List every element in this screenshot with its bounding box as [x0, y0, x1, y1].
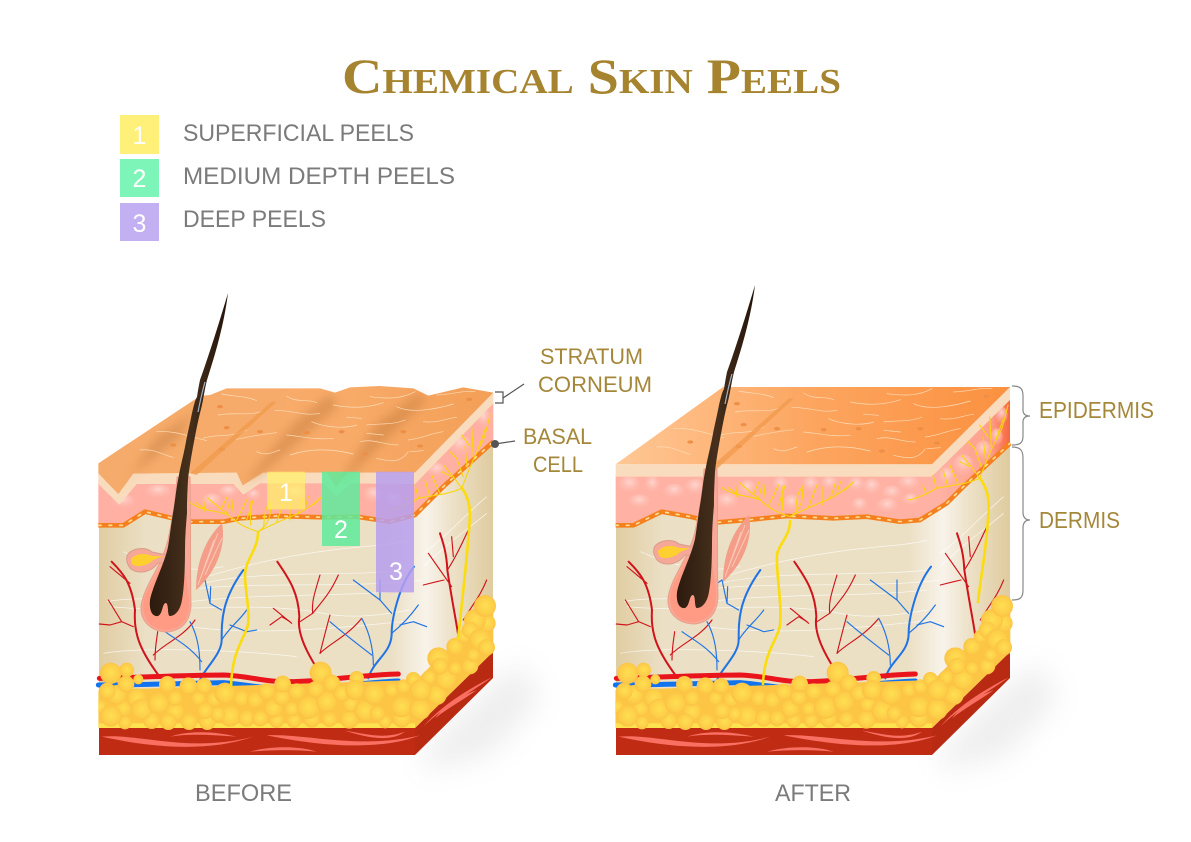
fat layer — [93, 595, 496, 730]
legend item: deep peels: DEEP PEELS — [183, 206, 326, 233]
caption: after: AFTER — [775, 780, 851, 807]
annotation: stratum corneum — [495, 344, 652, 403]
stratum corneum band — [98, 393, 493, 505]
epidermis cells — [618, 407, 1008, 514]
annotation: epidermis brace: EPIDERMIS — [1039, 397, 1154, 423]
legend — [120, 115, 455, 241]
nerve branches — [190, 497, 322, 532]
nerve stems — [231, 488, 470, 687]
caption: before: BEFORE — [195, 780, 292, 807]
stratum corneum band — [616, 387, 1010, 477]
peel depth 3 marker: 3 — [389, 558, 403, 586]
drop shadow: before block — [420, 665, 540, 770]
surface texture — [657, 388, 992, 472]
basal cell layer — [616, 443, 1010, 525]
side nerve branches — [908, 405, 1008, 500]
legend item: medium depth peels — [120, 159, 455, 197]
peel depth 3 marker — [376, 472, 414, 592]
hair and follicle — [654, 285, 755, 624]
legend item: medium depth peels: MEDIUM DEPTH PEELS — [183, 163, 455, 190]
epidermis cells — [112, 408, 491, 509]
muscle layer — [99, 652, 493, 755]
nerve stems — [763, 478, 989, 685]
legend item: deep peels — [120, 203, 326, 241]
after skin block — [610, 285, 1013, 755]
peel depth 1 marker — [267, 472, 305, 509]
annotation: dermis brace: DERMIS — [1039, 507, 1120, 533]
legend item: superficial peels — [120, 115, 414, 154]
basal cell layer — [98, 442, 493, 525]
epidermis — [616, 398, 1010, 525]
legend item: medium depth peels: 2 — [133, 165, 146, 193]
epidermis — [98, 402, 493, 525]
fat layer — [610, 595, 1013, 730]
annotation: basal cell — [491, 424, 592, 477]
dermis with vessels — [98, 430, 493, 730]
hair and follicle — [127, 293, 228, 632]
peel depth 2 marker: 2 — [334, 516, 348, 544]
infographic canvas — [96, 60, 1153, 801]
annotation: stratum corneum: STRATUM — [540, 344, 643, 369]
before skin block — [93, 293, 496, 755]
peel depth 2 marker — [322, 472, 360, 546]
dermis with vessels — [615, 430, 1010, 730]
legend item: superficial peels: SUPERFICIAL PEELS — [183, 120, 414, 147]
annotation: dermis brace — [1012, 447, 1120, 600]
side nerve branches — [390, 415, 490, 510]
legend item: deep peels: 3 — [133, 210, 146, 238]
annotation: stratum corneum: CORNEUM — [538, 372, 652, 397]
drop shadow: after block — [937, 665, 1057, 770]
legend item: superficial peels: 1 — [133, 122, 146, 150]
annotation: epidermis brace — [1012, 386, 1154, 445]
surface folds — [118, 393, 427, 494]
title: Chemical Skin Peels — [342, 48, 841, 104]
skin surface — [98, 386, 493, 494]
annotation: basal cell: BASAL — [523, 424, 592, 449]
muscle layer — [616, 652, 1010, 755]
surface texture — [140, 391, 475, 475]
peel depth 1 marker: 1 — [279, 479, 293, 507]
skin surface — [616, 387, 1010, 464]
annotation: basal cell: CELL — [533, 452, 583, 477]
nerve branches — [722, 482, 854, 517]
